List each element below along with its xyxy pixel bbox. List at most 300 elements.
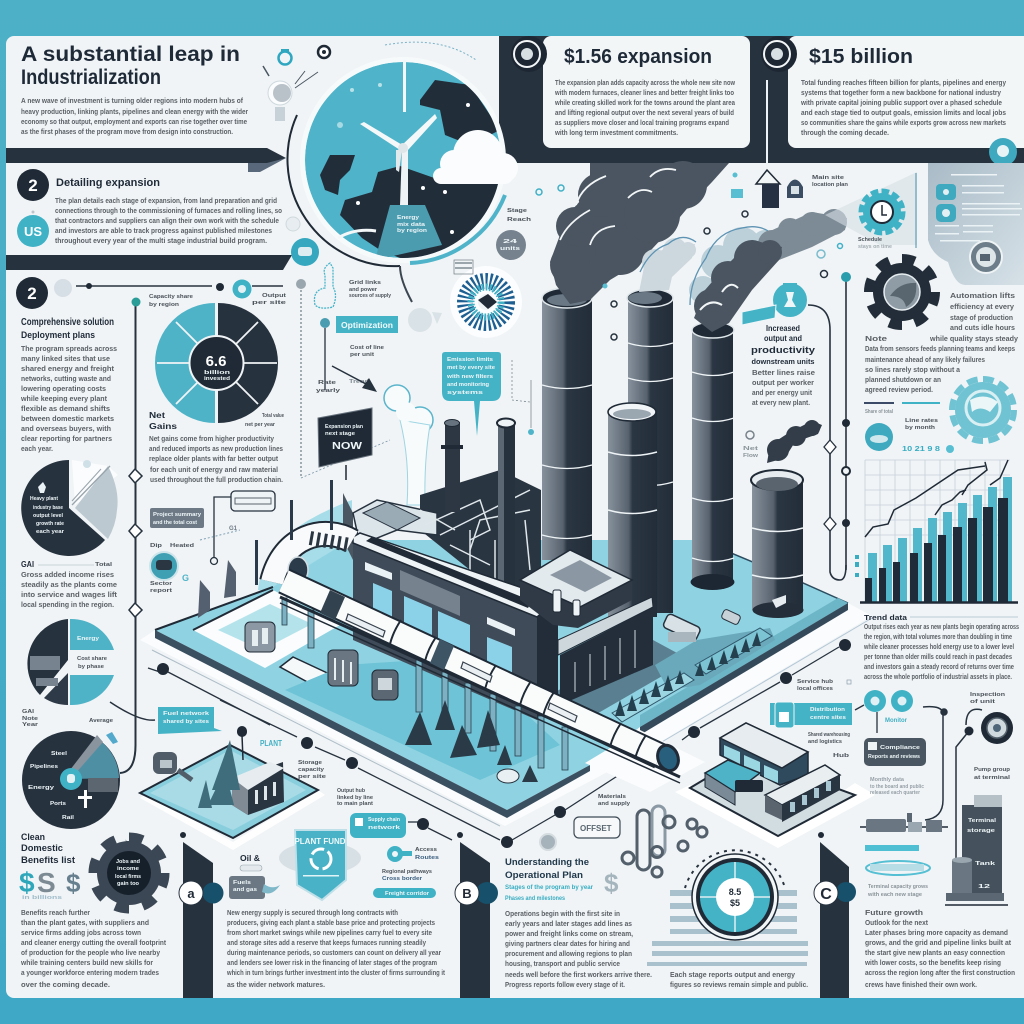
label: distribution note: and logistics [808,739,842,745]
callout tail from globe [400,266,412,302]
callout: teal right note: Distribution [810,707,846,713]
text block: understanding: Operations begin with the first site in [505,911,620,918]
column: divider b: B [462,886,472,901]
label: key note: Cross border [382,876,423,882]
icon: wind turbine [360,114,437,205]
arrow band: second divider [6,255,292,270]
text block: expansion details: that contractors and suppliers can align their own work with the schedule [55,218,279,225]
label: oil: Oil & [240,854,260,863]
label: teal mini tag: PLANT [260,739,282,748]
smoke: main plume [550,161,729,304]
text block: bottom left: Benefits reach further [21,910,90,917]
text block: expansion details: connections through to the commissioning of furnaces and rolling lines, so [55,208,282,215]
radial chart: Pipelines [30,764,58,770]
small labels around leaders: Storage [298,760,322,766]
icon: teal clock gear [861,191,903,233]
text block: expansion details: The plan details each stage of expansion, from land preparation and grid [55,198,277,205]
floating dots [536,185,842,439]
label: pie note: Average [89,718,113,724]
panel: left strip boxes [150,508,204,528]
pipe rings [390,620,646,759]
panel: left strip boxes: Project summary [153,512,202,518]
text block: bottom left: than the plant gates, with suppliers and [21,920,149,927]
callout: teal note [350,813,406,838]
globe [287,57,518,266]
chain links icon [622,806,707,877]
text block: center right body [752,370,815,407]
label: net gains: Total value [262,413,284,419]
teal outline node [314,263,336,308]
label: pie note: Note [22,716,38,722]
text block: introduction: economy so that output, employment and exports can rise together over time [21,119,247,126]
cloud [433,130,518,184]
icon: shield: PLANT FUND [294,837,346,846]
callout: teal right note: centre sites [810,715,846,721]
label: house note: Main site [812,175,844,181]
card: expansion: as suppliers move closer and local training programs expand [555,120,729,127]
text block: GAI: Gross added income rises [21,572,114,579]
text block: right mid [865,336,1018,394]
card: expansion: $1.56 expansion [564,46,712,68]
callout: teal speech bubble: met by every site [447,365,495,371]
text block: center right body: at every new plant. [752,400,810,407]
small labels around leaders: Service hub [797,679,834,685]
chart teal bars [868,477,1012,602]
text block: net gains: used throughout the full production chain. [150,477,283,484]
timeline: vertical connector [110,298,155,773]
icon: tower facility: Terminal [968,818,997,824]
labels: terminal notes [865,845,930,898]
heading: comprehensive [21,317,114,340]
callout: outlined tag: OFFSET [580,824,612,833]
card: expansion [543,36,750,148]
text block: comprehensive: between domestic markets [21,416,114,423]
text block: right upper: Automation lifts [950,293,1015,300]
icon: dollar signs: $ [19,867,35,898]
callout: outlined tag [574,817,620,838]
icons: light bulb and top marks [263,42,476,121]
donut chart: invested [204,376,230,382]
icon: small grey seal [540,834,556,850]
callout: teal speech bubble: Emission limits [447,357,493,363]
text block: understanding: power and freight links come on stream, [505,931,633,938]
pipeline [272,534,682,783]
column: divider a [179,832,224,998]
radial chart: Energy [28,785,55,791]
smoke: small plume [767,420,822,463]
small labels around leaders [298,679,834,807]
pie chart: share: industry base [33,505,63,511]
label: pie note: GAI [22,709,35,715]
text block: comprehensive: shared energy and freight [21,366,115,373]
globe: mix data [397,222,426,228]
text block: introduction: A new wave of investment is turning older regions into modern hubs of [21,98,244,105]
text block: GAI [21,572,118,609]
text block: ring caption: Each stage reports output and energy [670,972,795,979]
label: compliance text: to the board and public [870,784,924,790]
label: stack note [743,446,759,459]
icon: lens [964,712,1013,744]
label: donut top: Output [262,293,286,299]
badge: grey stat: 24 [503,239,519,245]
heading: understanding: Operational Plan [505,870,583,880]
text block: net gains: replace older plants with far better output [149,456,279,463]
icon: teal badge [989,138,1017,166]
text block: GAI: into service and wages lift [21,592,118,599]
pill: teal tag: Freight corridor [385,891,430,897]
text block: bottom left [20,910,167,989]
steam puffs [384,385,433,505]
pill: teal tag [373,888,436,898]
pins: connector nodes [157,639,851,848]
small labels around leaders: per site [298,774,326,780]
legend: right mid: Line rates [905,418,938,424]
pie chart: share: output level [33,513,63,519]
sign board: Expansion plan [325,424,364,430]
pipe rail [280,597,680,783]
pie chart: breakdown [27,619,114,705]
pie chart: breakdown: Energy [77,636,100,642]
text block: net gains: Net gains come from higher productivity [149,436,274,443]
label: clock note [858,237,892,250]
text block: bottom left: over the coming decade. [21,982,110,989]
badge: first number [511,36,547,72]
text block: bottom center: and storage sites add a reserve that keeps furnaces running steadily [227,940,426,947]
icon: tower facility: storage [967,828,995,834]
label: center small [316,345,384,394]
text block: bottom center: as the wider network matures. [227,982,325,989]
text block: GAI: steadily as the plants come [21,582,117,589]
wing block [765,765,840,822]
icon: large gear: income [117,866,139,872]
icon: small pipeline unit [860,813,948,832]
connector lines: isometric leaders [148,647,839,840]
donut chart: billion [204,370,231,376]
labels: upper center: Grid links [349,280,381,286]
small labels around leaders: capacity [298,767,325,773]
label: distribution note: Shared warehousing [808,732,850,738]
ring diagram [647,850,808,966]
text block: bottom left: while training centers build new skills for [20,960,153,967]
callout: teal speech bubble: and monitoring [447,382,489,388]
ring diagram: 8.5 [729,887,741,897]
radial chart: Ports [50,801,66,807]
text block: understanding: Progress reports follow every stage of it. [505,982,625,989]
icon: dark gear [869,259,935,325]
label: lens note: Pump group [974,767,1011,773]
stack C [608,403,657,617]
teal hill behind pipe [258,500,352,600]
text block: center right heading [751,324,816,366]
factory right block [520,550,653,705]
labels and badge: mid left yard: Heated [170,543,194,549]
text block: bottom center: producers, giving each plant a stable base price and protecting projects [227,920,435,927]
icon: large gear [93,837,165,909]
text block: right mid: planned shutdown or an [865,377,941,384]
badge: grey stat: units [500,246,520,252]
icon: dollar signs: in billions [22,895,62,901]
small labels around leaders: to main plant [337,801,373,807]
stack A [542,288,592,560]
label: key note [382,847,439,882]
text block: comprehensive: many linked sites that use [21,356,110,363]
card: expansion: while creating skilled work for the towns around the plant area [554,100,735,107]
labels and badge: mid left yard: Sector [150,581,173,587]
label: center small: Cost of line [350,345,384,351]
text block: comprehensive: lowering operating costs [21,386,106,393]
text block: bottom left: of production for the people who live nearby [21,950,160,957]
icon dots teal [602,172,743,288]
donut chart: 6.6 [206,353,226,370]
building on island [232,762,284,815]
icon: shield [279,830,361,900]
globe dots [337,83,470,234]
donut chart [155,303,278,423]
text block: bottom left: a younger workforce entering modern trades [21,970,159,977]
text block: center right heading: productivity [751,345,816,356]
labels and badge: mid left yard [150,526,240,594]
text block: GAI: local spending in the region. [21,602,114,609]
chart axis labels [855,555,859,577]
panel: header dark band [499,36,1024,166]
connector: right vertical timeline [808,272,851,580]
callout: grey speech: and gas [233,887,257,893]
small labels around leaders: local offices [797,686,833,692]
callout: teal note: Supply chain [368,817,401,823]
pillars under pipeline [282,598,568,770]
labels: terminal notes: with each new stage [867,892,922,898]
text block: comprehensive: while keeping every plant [20,396,108,403]
callout: grey speech: Fuels [233,880,251,886]
island: lower left plant [140,727,325,850]
label: center small: per unit [350,352,374,358]
label: clock note: Schedule [858,237,882,243]
globe: by region [397,228,428,234]
heading: clean domestic benefits [21,832,75,865]
label: oil [240,854,262,871]
trees on island [198,740,240,808]
text block: ring caption [670,972,808,989]
factory platform [140,500,872,826]
arrow band: first divider [6,148,286,172]
chart trend lines [865,460,1008,537]
text block: right mid: maintenance ahead of any likely failures [865,357,985,364]
icon: faint dollar: $ [604,868,619,898]
text block: center right body: and per energy unit [752,390,813,397]
text block: understanding [505,911,652,989]
chart dark bars [865,498,1008,602]
radial chart [22,731,120,829]
badge: grey stat [496,208,532,260]
card: 15 billion: and each stage tied to output goals, emission limits and local jobs [801,110,1006,117]
label: donut top: per site [252,300,286,306]
text block: comprehensive: each year. [21,446,53,453]
labels and badge: mid left yard: G1 [229,526,238,532]
callout: teal note: network [368,825,401,831]
text block: understanding: procurement and allowing regions to plan [505,951,632,958]
title: Industrialization [21,66,161,89]
label: net gains [149,411,284,431]
label: lens note: at terminal [974,775,1011,781]
pie chart: share: Heavy plant [30,496,58,502]
text block: comprehensive: networks, cutting waste and [21,376,111,383]
label: pie note [22,709,113,728]
connector: top timeline [54,279,283,298]
labels: terminal notes: Terminal capacity grows [868,884,928,890]
heading: clean domestic benefits: Benefits list [21,855,75,865]
badge: section 2: 2 [28,176,38,195]
text block: bottom right: grows, and the grid and pipeline links built at [865,940,1012,947]
icon: sun burst [450,266,522,338]
card: 15 billion: $15 billion [809,46,913,68]
label: GAI: GAI [21,560,34,569]
card: expansion: with modern furnaces, cleaner lines and better freight links too [554,90,734,97]
text block: understanding: early years and later stages add lines as [505,921,632,928]
card: expansion: with long term investment commitments. [554,130,678,137]
label: donut top [149,293,286,308]
label: distribution note [808,732,850,759]
pie chart: share: growth rate [36,521,64,527]
label: clock note: stays on time [858,244,892,250]
text block: net gains: and reduced imports as new production lines [149,446,283,453]
pipe plates [346,614,577,722]
text block: center right body: Better lines raise [752,370,815,377]
text block: right upper: and cuts idle hours [950,325,1015,332]
text block: expansion details [55,198,282,245]
icon: house pointer [756,80,803,208]
text block: understanding: giving partners clear dates for hiring and [505,941,630,948]
factory back structures [343,418,541,600]
label: GAI: Total [95,562,113,568]
icons in grey card [936,184,956,222]
text block: under chart [863,613,1019,681]
heading: comprehensive: Comprehensive solution [21,317,114,328]
text block: comprehensive: and overseas buyers, with [21,426,111,433]
text block: comprehensive: clear reporting for partners [21,436,112,443]
label: pie note: Year [22,722,39,728]
icon: large gear: Jobs and [116,859,140,865]
text block: bottom right: Outlook for the next [865,920,929,927]
text block: bottom center: from short market swings while new pipelines carry fuel to every site [227,930,432,937]
stack B [627,289,673,613]
text block: bottom center: during maintenance periods, so customers can count on delivery all year [227,950,441,957]
chart: growth bars [855,460,1018,602]
trees: under pipeline [405,700,538,782]
badge: section 2b [16,277,48,309]
text block: bottom center: and lenders see lower risk in the financing of later stages of the program [227,960,437,967]
text block: bottom right: Future growth [865,910,923,917]
label: center small: Trend [349,379,369,385]
text block: under chart: Trend data [864,613,908,622]
labels: upper center: sources of supply [349,293,392,299]
card: 15 billion [788,36,1024,148]
callout: teal right note [770,702,852,728]
label: donut top: by region [149,302,180,308]
icon: teal key [387,846,412,862]
smoke: light plume [639,237,696,292]
panel: grey info card [928,163,1024,285]
text block: introduction: as the first phases of the program move from design into construction. [21,129,233,136]
card: expansion: and lifting regional output over the next several years of build [555,110,734,117]
sign board [318,408,372,480]
label: donut top: Capacity share [149,294,193,300]
text block: bottom right: with lower costs, so the benefits keep rising [864,960,1001,967]
card: 15 billion: systems that together form a new backbone for national industry [801,90,1001,97]
column: divider b [455,832,498,998]
text block: comprehensive: flexible as demand shifts [21,406,110,413]
text block: bottom right [864,910,1015,989]
text block: bottom left: service firms adding jobs across town [21,930,141,937]
text block: net gains [149,436,283,484]
icon: large gear: local firms [115,874,141,880]
radial chart: Steel [51,751,68,757]
callout: dark note: Compliance [880,745,920,751]
white box in yard [280,657,338,690]
trees: row right [615,632,761,716]
text block: ring caption: figures so reviews remain simple and public. [670,982,808,989]
pin: callout connector [408,818,452,840]
icon: teal vase [742,283,807,325]
factory main building [353,533,558,720]
column: divider a: a [187,886,195,901]
gradient wedge from gear [825,172,917,245]
icon: teal leaf [106,732,118,744]
label: key note: Routes [415,855,439,861]
label: house note [812,175,849,188]
sign board: NOW [332,441,363,452]
tag: outlined top [210,491,275,564]
icons: fence posts [198,480,333,618]
text block: right upper: stage of production [950,315,1013,322]
card: 15 billion: through the coming decade. [801,130,889,137]
thin chimney rear [441,420,463,512]
text block: bottom right: the start give new plants an easy connection [865,950,1005,957]
text block: center right heading: output and [764,334,802,343]
ring diagram: $5 [730,898,740,908]
text block: net gains: for each unit of energy and raw material [150,467,278,474]
text block: bottom center: which in turn brings further investment into the cluster of firms surrounding it [226,970,446,977]
text block: right upper: efficiency at every [950,304,1014,311]
callout: teal left note [158,707,222,734]
globe: Energy [397,215,420,221]
text block: expansion details: and investors are able to track progress against published milestones [55,228,272,235]
thin chimney front [497,418,515,594]
island: lower right complex [675,723,875,848]
label: lens note: of unit [970,699,995,705]
column: divider c: C [820,886,832,903]
equipment: right yard [662,609,741,642]
legend: right mid: by month [905,425,936,431]
label: key note: Access [415,847,437,853]
sign board: next stage [325,431,355,437]
label: upper grey seal [454,260,473,274]
rock: white foreground [497,769,519,783]
label: compliance text: released each quarter [870,790,921,796]
text block: right mid: so lines rarely stop without a [865,367,960,374]
icon: dollar signs [19,867,81,901]
white yard with track [193,590,340,668]
column: divider c [814,832,856,998]
callout: dark note: Reports and reviews [868,754,920,760]
panel: left strip boxes: and the total cost [153,520,197,526]
card: expansion: The expansion plan adds capacity across the whole new site now [555,80,735,87]
small label: connector note: Materials [598,794,626,800]
callout: teal speech bubble: with new filters [446,374,493,380]
label: stack note: Net [743,446,758,452]
heading: clean domestic benefits: Domestic [21,843,63,853]
icon: grey puffs beside burst [408,308,442,332]
label: stack note: Flow [743,453,759,459]
